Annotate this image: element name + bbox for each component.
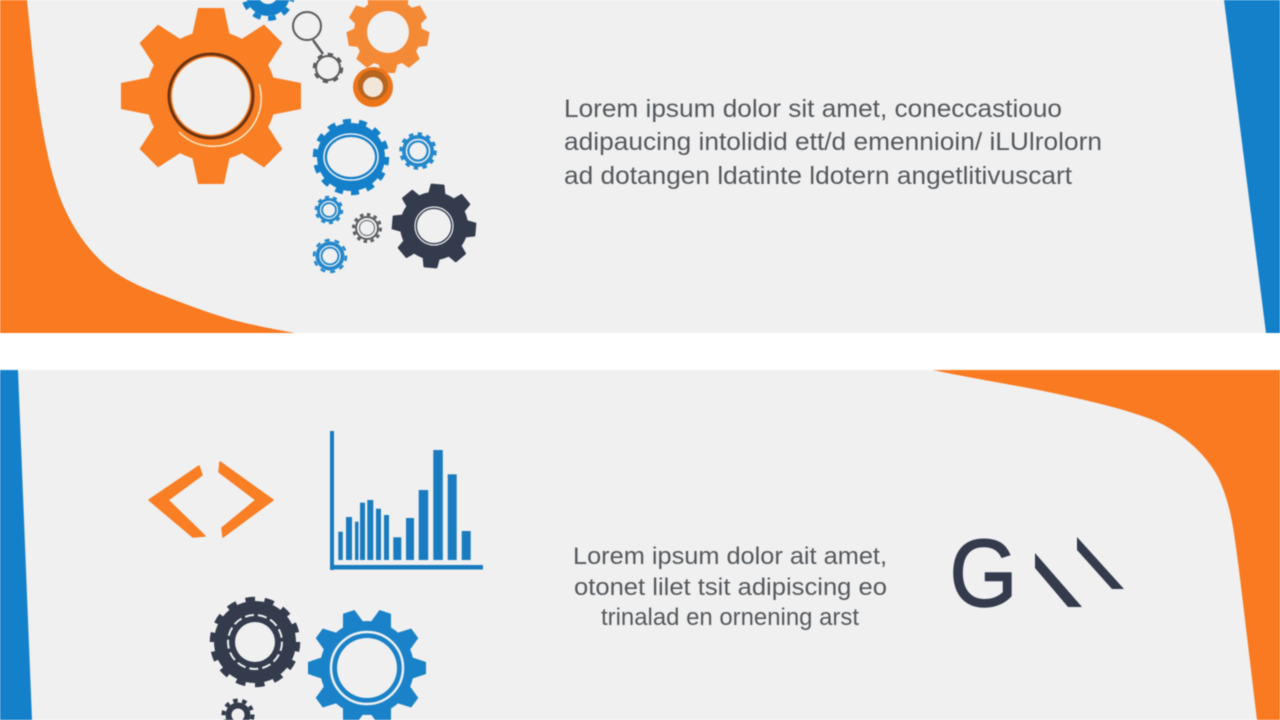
text block: bottom description: trinalad en ornening arst (601, 604, 859, 631)
text block: bottom description: Lorem ipsum dolor ait amet, (573, 543, 887, 570)
text block: top description (564, 95, 1102, 190)
icon: outlined linked gears (293, 12, 342, 82)
icon: G logo with slashes: G (950, 520, 1018, 627)
text block: top description: Lorem ipsum dolor sit amet, coneccastiouo (564, 95, 1062, 123)
icon: navy gear (392, 184, 476, 268)
icon: small navy gear cropped at bottom (224, 700, 252, 720)
text block: top description: adipaucing intolidid ett/d emennioin/ iLUlrolorn (564, 128, 1102, 156)
icon: small outlined grey gear (354, 214, 380, 242)
top-right orange corner shape (933, 370, 1280, 720)
top-right blue strip (1224, 0, 1280, 333)
icon: orange ring (353, 67, 393, 107)
icon: orange code chevrons (149, 462, 273, 537)
panel: top banner (0, 0, 1280, 333)
icon: small blue gear bottom (314, 240, 346, 272)
text block: bottom description (573, 543, 887, 631)
text block: top description: ad dotangen ldatinte ldotern angetlitivuscart (564, 162, 1072, 190)
icon: navy gear with dashed ring (212, 599, 298, 685)
bottom-left blue strip (0, 370, 32, 720)
bar chart (330, 431, 483, 570)
icon: orange gear top right (346, 0, 430, 73)
icon: small blue gear right (401, 134, 435, 168)
icon: blue gear cropped at top (244, 0, 292, 18)
top-left orange corner shape (0, 0, 295, 333)
icon: small blue gear lower left (316, 197, 342, 223)
icon: blue gear medium (315, 121, 387, 193)
text block: bottom description: otonet lilet tsit adipiscing eo (574, 574, 887, 601)
icon: large blue gear (308, 608, 426, 720)
icon: large orange gear (121, 8, 301, 184)
icon: G logo with slashes (950, 520, 1124, 627)
panel: bottom banner (0, 370, 1280, 720)
